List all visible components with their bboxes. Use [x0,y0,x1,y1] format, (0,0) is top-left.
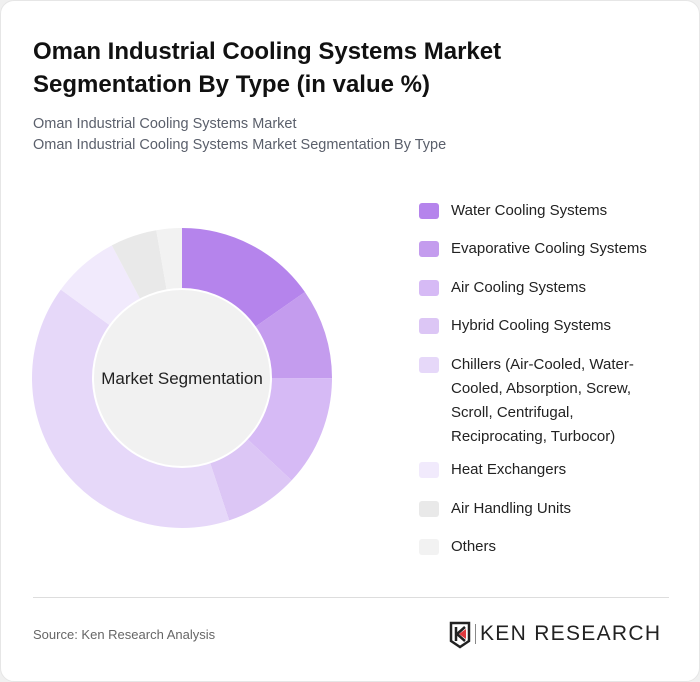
legend: Air Cooling Systems [451,279,586,296]
legend: Water Cooling Systems [451,202,607,219]
legend: Heat Exchangers [451,461,566,478]
legend: Reciprocating, Turbocor) [451,428,615,445]
title: Oman Industrial Cooling Systems Market [33,38,501,65]
legend: Scroll, Centrifugal, [451,404,574,421]
title: Segmentation By Type (in value %) [33,71,430,98]
legend: Chillers (Air-Cooled, Water- [451,356,634,373]
legend: Cooled, Absorption, Screw, [451,380,631,397]
subtitle: Oman Industrial Cooling Systems Market Segmentation By Type [33,137,446,153]
legend [419,202,647,555]
legend: Others [451,538,496,555]
donut chart: Market Segmentation [101,369,263,388]
donut chart [32,228,332,528]
title [33,38,501,98]
source: Source: Ken Research Analysis [33,627,215,642]
logo: KEN RESEARCH [480,622,661,645]
legend: Evaporative Cooling Systems [451,240,647,257]
subtitle: Oman Industrial Cooling Systems Market [33,116,297,132]
legend: Air Handling Units [451,500,571,517]
legend: Hybrid Cooling Systems [451,317,611,334]
subtitle [33,116,446,153]
